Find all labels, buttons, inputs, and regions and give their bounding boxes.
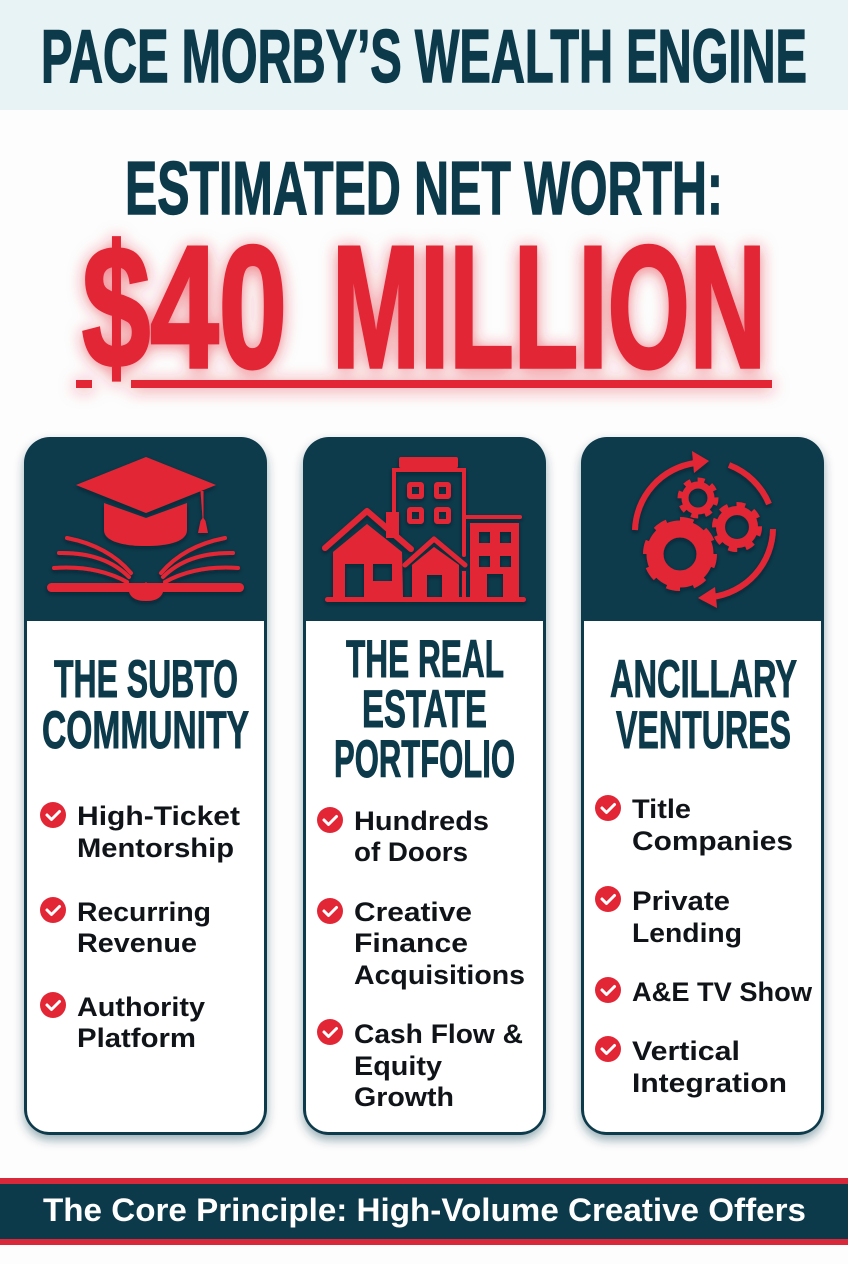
card frame	[24, 437, 267, 1135]
list item: creative finance acquisitions: Finance	[354, 928, 468, 958]
heading: THE REAL	[346, 630, 504, 689]
heading: THE SUBTO	[54, 650, 238, 709]
list item: creative finance acquisitions: Creative	[354, 897, 472, 927]
list item: authority platform	[40, 992, 205, 1053]
list item: creative finance acquisitions	[317, 897, 525, 990]
list item: cash flow and equity growth: Growth	[354, 1082, 454, 1112]
title banner	[0, 0, 848, 110]
list item: cash flow and equity growth: Equity	[354, 1051, 442, 1081]
list item: private lending: Private	[632, 886, 730, 916]
heading	[610, 650, 797, 760]
list item: high-ticket mentorship: High-Ticket	[77, 801, 240, 831]
footer banner	[0, 1178, 848, 1245]
list item: authority platform: Platform	[77, 1023, 196, 1053]
list item: cash flow and equity growth	[317, 1019, 523, 1112]
list item: recurring revenue: Revenue	[77, 928, 197, 958]
list item: title companies: Title	[632, 794, 691, 824]
icon: graduation cap on book	[47, 457, 244, 601]
card frame	[303, 437, 546, 1135]
list item: high-ticket mentorship: Mentorship	[77, 833, 234, 863]
list item: title companies: Companies	[632, 826, 793, 856]
headline figure: $40 million	[76, 209, 772, 404]
list item: hundreds of doors	[317, 806, 489, 867]
list item: hundreds of doors: of Doors	[354, 837, 468, 867]
icon: houses and buildings	[325, 457, 526, 602]
list item: recurring revenue	[40, 897, 211, 958]
list item: private lending: Lending	[632, 918, 742, 948]
list item: high-ticket mentorship	[40, 801, 240, 863]
list item: recurring revenue: Recurring	[77, 897, 211, 927]
list item: creative finance acquisitions: Acquisitions	[354, 960, 525, 990]
panel: the real estate portfolio	[303, 437, 546, 1135]
heading: COMMUNITY	[42, 701, 249, 760]
panel: ancillary ventures	[581, 437, 824, 1135]
card frame	[581, 437, 824, 1135]
panel: the subto community	[24, 437, 267, 1135]
heading	[42, 650, 249, 760]
footer text: The Core Principle: High-Volume Creative Offers	[43, 1192, 806, 1228]
list item: private lending	[595, 886, 742, 948]
list item: authority platform: Authority	[77, 992, 205, 1022]
list item: vertical integration: Integration	[632, 1068, 787, 1098]
list item: vertical integration	[595, 1036, 787, 1098]
heading: ESTATE	[362, 680, 487, 739]
list item: vertical integration: Vertical	[632, 1036, 740, 1066]
list item: hundreds of doors: Hundreds	[354, 806, 489, 836]
headline figure: $40 million: $40	[82, 209, 287, 404]
list item: cash flow and equity growth: Cash Flow &	[354, 1019, 523, 1049]
heading: PORTFOLIO	[334, 730, 515, 789]
heading	[334, 630, 515, 789]
icon: gears in circular arrows	[635, 451, 773, 608]
list item: title companies	[595, 794, 793, 856]
list item: a&e tv show: A&E TV Show	[632, 977, 813, 1007]
